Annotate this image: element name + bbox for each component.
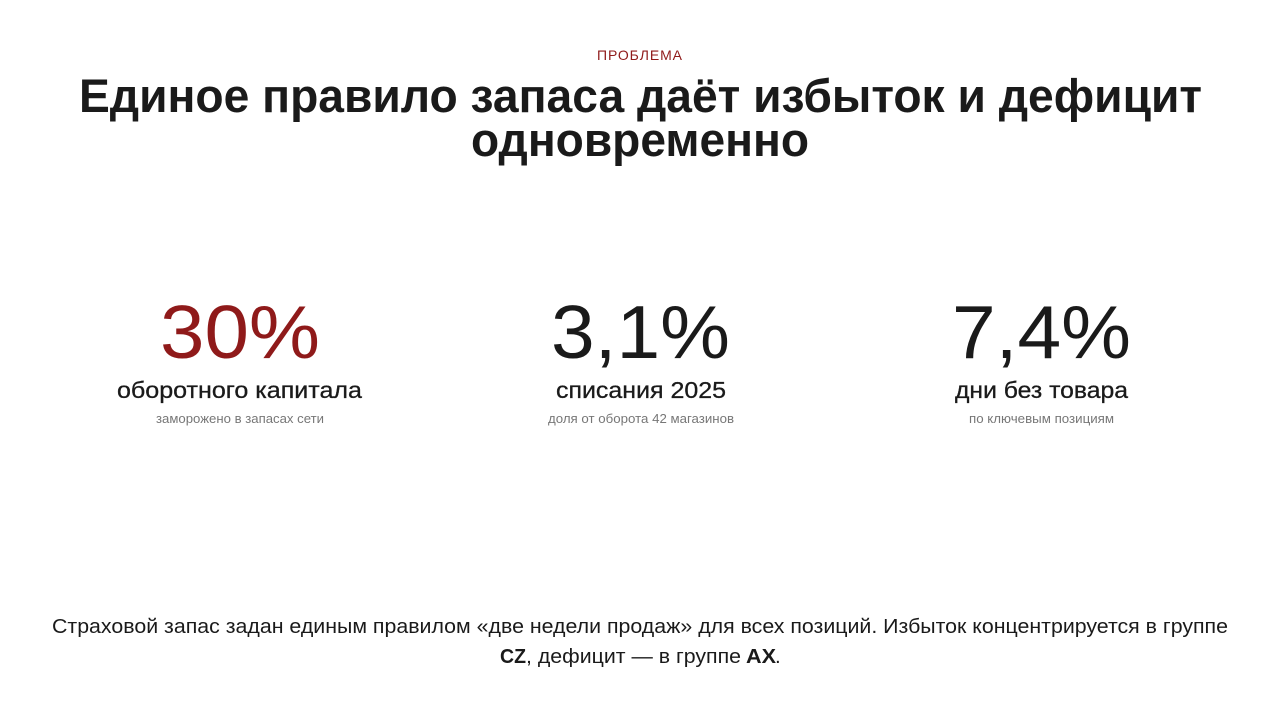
stat value: 7,4%: 7,4% (952, 290, 1131, 374)
stat: write-offs (548, 290, 734, 426)
kicker: section label: ПРОБЛЕМА (597, 47, 683, 63)
body text: conclusion (52, 615, 1228, 668)
title: Единое правило запаса даёт избыток и дефицит (79, 69, 1202, 122)
body text: conclusion: , дефицит — в группе (526, 645, 741, 668)
body text: conclusion: AX (746, 645, 776, 668)
stat label: out-of-stock days: дни без товара (955, 377, 1128, 403)
stat value: 30%: 30% (160, 290, 320, 374)
title (79, 69, 1202, 166)
stat note: write-offs: доля от оборота 42 магазинов (548, 412, 734, 426)
stat note: working capital: заморожено в запасах сети (156, 412, 324, 426)
title: одновременно (471, 113, 809, 166)
body text: conclusion: . (775, 645, 781, 668)
stat note: out-of-stock days: по ключевым позициям (969, 412, 1114, 426)
body text: conclusion: CZ (500, 645, 526, 668)
stat: out-of-stock days (952, 290, 1131, 426)
stat value: 3,1%: 3,1% (551, 290, 730, 374)
stat label: working capital: оборотного капитала (117, 377, 362, 403)
stat label: write-offs: списания 2025 (556, 377, 726, 403)
body text: conclusion: Страховой запас задан единым правилом «две недели продаж» для всех позиций. Избыток концентрируется в группе (52, 615, 1228, 638)
stat: working capital (117, 290, 362, 426)
